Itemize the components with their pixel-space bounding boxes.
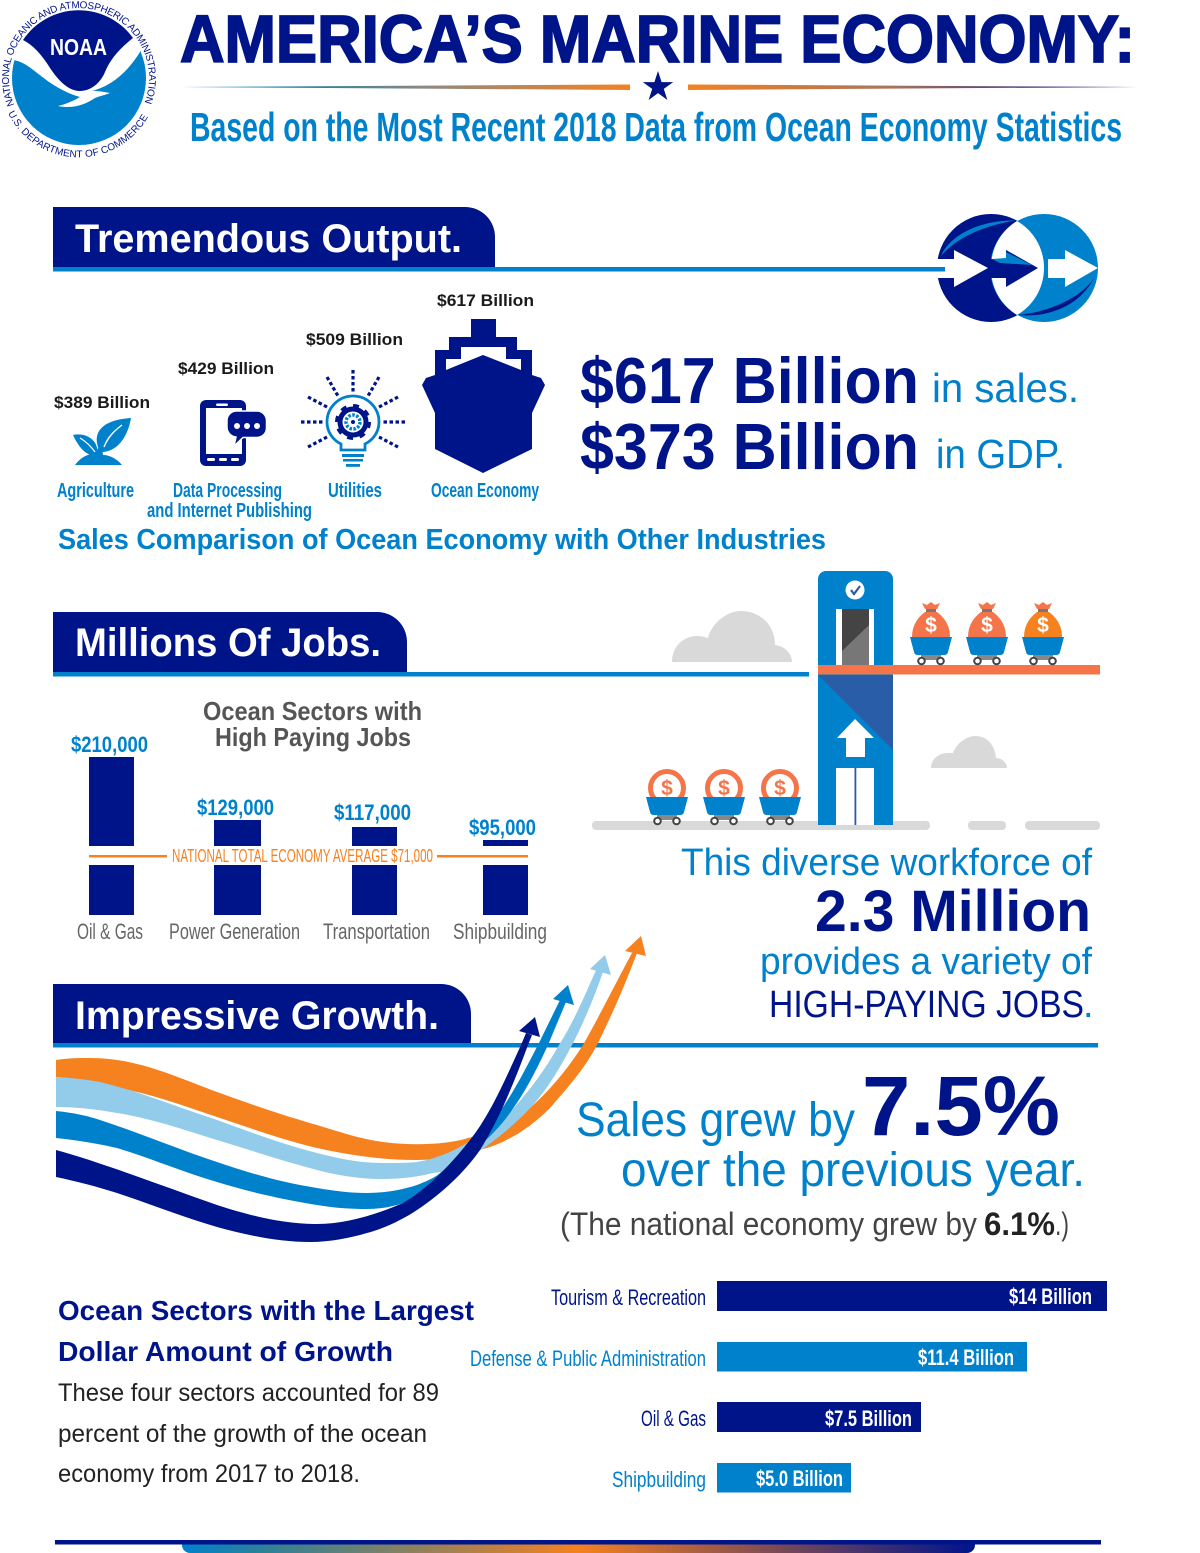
icon: cloud left — [672, 611, 792, 662]
heading: impressive growth — [53, 984, 1098, 1048]
money bags in carts — [910, 602, 1064, 664]
comparison column: agriculture — [54, 393, 150, 502]
bar: shipbuilding — [612, 1463, 851, 1492]
chart title — [203, 696, 422, 752]
heading: tremendous output: Tremendous Output. — [75, 217, 462, 261]
footer rule — [55, 1540, 1101, 1553]
coin cart 3: $ — [774, 777, 786, 800]
arrow: light blue — [56, 955, 611, 1179]
panel: millions of jobs — [53, 571, 1100, 1026]
coin cart 1: $ — [661, 777, 673, 800]
national economy note: (The national economy grew by — [560, 1206, 977, 1242]
bar: power generation: Power Generation — [169, 919, 300, 944]
arrow: navy — [56, 1017, 540, 1242]
icon: cloud right — [931, 736, 1007, 768]
bag cart 3: $ — [1037, 614, 1049, 637]
comparison column: utilities: $509 Billion — [306, 330, 403, 349]
panel: tremendous output — [53, 207, 1098, 556]
bag cart 2: $ — [981, 614, 993, 637]
largest growth text: Ocean Sectors with the Largest — [58, 1295, 474, 1326]
comparison column: ocean economy — [422, 291, 545, 502]
bar: defense and public administration — [470, 1342, 1027, 1372]
icon: light bulb with gear — [301, 370, 405, 467]
coin cart 2: $ — [718, 777, 730, 800]
sales growth stat: over the previous year. — [621, 1144, 1085, 1197]
comparison column: agriculture: $389 Billion — [54, 393, 150, 412]
comparison column: ocean economy: Ocean Economy — [431, 480, 540, 502]
coin cart 2 — [703, 772, 745, 824]
heading: millions of jobs: Millions Of Jobs. — [75, 621, 381, 665]
chart caption: Sales Comparison of Ocean Economy with Other Industries — [58, 524, 826, 556]
stat: sales: in sales. — [932, 365, 1079, 411]
icon: phone with speech bubble — [200, 400, 266, 466]
icon: plant — [73, 418, 131, 465]
bar: transportation — [323, 800, 430, 944]
arrow: blue — [56, 985, 574, 1209]
bar: power generation: $129,000 — [197, 795, 274, 820]
bag cart 1 — [910, 602, 952, 664]
heading: tremendous output — [53, 207, 945, 272]
rising wave arrows — [56, 936, 646, 1242]
bar: oil and gas: $7.5 Billion — [825, 1406, 912, 1431]
workforce callout: This diverse workforce of — [681, 842, 1092, 884]
comparison column: utilities — [301, 330, 405, 502]
NOAA logo: NOAA — [50, 34, 107, 60]
stat: gdp: $373 Billion — [580, 410, 919, 483]
average line: NATIONAL TOTAL ECONOMY AVERAGE $71,000 — [172, 846, 433, 866]
largest growth text: These four sectors accounted for 89 — [58, 1379, 439, 1407]
comparison column: data processing — [147, 359, 312, 522]
NOAA logo: U.S. DEPARTMENT OF COMMERCE — [9, 110, 148, 158]
workforce callout: HIGH-PAYING JOBS — [769, 984, 1084, 1026]
comparison column: utilities: Utilities — [328, 480, 382, 502]
coin cart 3 — [759, 772, 801, 824]
bar: shipbuilding: Shipbuilding — [453, 919, 547, 944]
bar: power generation — [169, 795, 300, 944]
bag cart 1: $ — [925, 614, 937, 637]
comparison column: data processing: $429 Billion — [178, 359, 274, 378]
bar: transportation: $117,000 — [334, 800, 411, 825]
chart title: High Paying Jobs — [215, 722, 411, 752]
national economy note: .) — [1055, 1206, 1069, 1242]
icon: overlapping circles with arrows — [937, 214, 1098, 322]
bar: oil and gas: Oil & Gas — [77, 919, 143, 944]
bar chart: growth by sector — [470, 1281, 1107, 1492]
workforce callout: . — [1083, 984, 1094, 1026]
sales growth stat: Sales grew by — [576, 1094, 855, 1147]
bag cart 2 — [966, 602, 1008, 664]
largest growth text — [58, 1295, 474, 1488]
largest growth text: economy from 2017 to 2018. — [58, 1460, 360, 1488]
bar: defense and public administration: $11.4 Billion — [918, 1345, 1014, 1370]
bar: tourism and recreation: $14 Billion — [1009, 1284, 1092, 1309]
bar: tourism and recreation — [551, 1281, 1107, 1311]
heading: millions of jobs — [53, 612, 809, 676]
bar: defense and public administration: Defense & Public Administration — [470, 1346, 706, 1371]
bar: shipbuilding: Shipbuilding — [612, 1467, 706, 1492]
road — [592, 821, 1100, 830]
upper platform — [818, 665, 1100, 674]
coins in carts — [646, 772, 801, 824]
heading: impressive growth: Impressive Growth. — [75, 994, 439, 1038]
bar: oil and gas — [641, 1402, 921, 1432]
largest growth text: Dollar Amount of Growth — [58, 1336, 393, 1367]
workforce callout: provides a variety of — [760, 941, 1092, 983]
largest growth text: percent of the growth of the ocean — [58, 1420, 427, 1448]
national economy note: 6.1% — [984, 1206, 1055, 1242]
elevator tower — [818, 571, 893, 825]
comparison column: data processing: Data Processing — [173, 480, 282, 502]
workforce callout — [681, 842, 1094, 1026]
chart title: Ocean Sectors with — [203, 696, 422, 726]
NOAA logo — [2, 1, 156, 158]
comparison column: ocean economy: $617 Billion — [437, 291, 534, 310]
coin cart 1 — [646, 772, 688, 824]
bar: shipbuilding: $5.0 Billion — [756, 1466, 843, 1491]
comparison column: agriculture: Agriculture — [57, 480, 134, 502]
bar: transportation: Transportation — [323, 919, 430, 944]
stat: gdp: in GDP. — [936, 431, 1065, 477]
bar chart: high paying jobs — [71, 732, 547, 944]
icon: ship — [422, 319, 545, 473]
comparison column: data processing: and Internet Publishing — [147, 500, 312, 522]
sales growth stat: 7.5% — [862, 1059, 1060, 1153]
arrow: orange — [56, 936, 646, 1160]
illustration: elevator raising money carts — [592, 571, 1100, 830]
title divider with star — [180, 71, 1138, 100]
title: AMERICA’S MARINE ECONOMY: — [180, 2, 1135, 77]
bar: shipbuilding: $95,000 — [469, 815, 536, 840]
workforce callout: 2.3 Million — [815, 879, 1091, 944]
bar: oil and gas — [71, 732, 148, 944]
bar: oil and gas: Oil & Gas — [641, 1406, 706, 1431]
panel: impressive growth — [53, 936, 1107, 1492]
bag cart 3 — [1022, 602, 1064, 664]
bar: oil and gas: $210,000 — [71, 732, 148, 757]
bar: tourism and recreation: Tourism & Recreation — [551, 1285, 706, 1310]
sales growth stat — [576, 1059, 1085, 1197]
stat: sales: $617 Billion — [580, 344, 919, 417]
NOAA logo: NATIONAL OCEANIC AND ATMOSPHERIC ADMINISTRATION — [2, 1, 156, 106]
bar: shipbuilding — [453, 815, 547, 944]
